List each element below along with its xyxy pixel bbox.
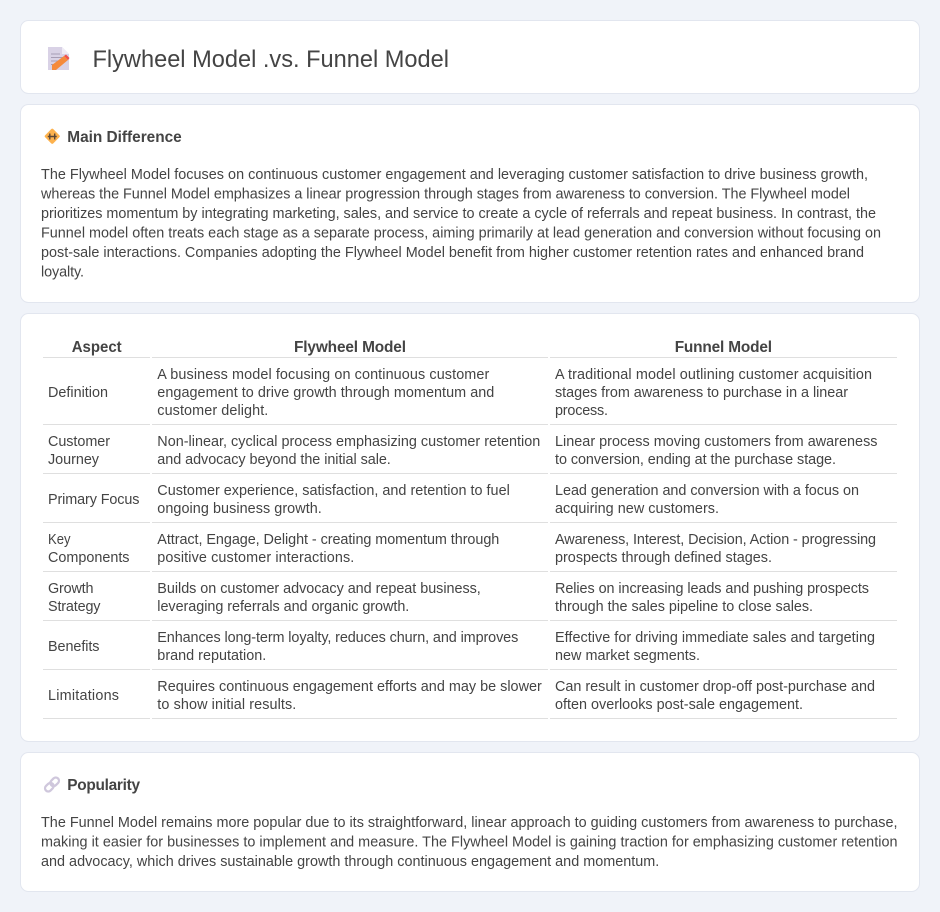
- table row: key components: [48, 532, 876, 566]
- table row: growth strategy: through the sales pipeline to close sales.: [555, 599, 813, 615]
- table row: key components: Awareness, Interest, Decision, Action - progressing: [555, 532, 876, 548]
- text block: main difference paragraph: Funnel model often treats each stage as a separate process, aiming primarily at lead generation and conversion without focusing on: [41, 226, 881, 242]
- text block: main difference paragraph: The Flywheel Model focuses on continuous customer engagement and leveraging customer satisfaction to drive business growth,: [41, 167, 868, 183]
- heading: popularity: Popularity: [67, 777, 140, 794]
- table row: growth strategy: Relies on increasing leads and pushing prospects: [555, 581, 869, 597]
- text block: popularity paragraph: making it easier for businesses to implement and measure. The Flywheel Model is gaining traction for emphasizing customer retention: [41, 834, 898, 850]
- table row: customer journey: Journey: [48, 452, 100, 468]
- text block: main difference paragraph: prioritizes momentum by integrating marketing, sales, and service to create a cycle of referrals and repeat business. In contrast, the: [41, 206, 876, 222]
- table row: benefits: Effective for driving immediate sales and targeting: [555, 630, 875, 646]
- table row: key components: Attract, Engage, Delight - creating momentum through: [157, 532, 499, 548]
- table row: benefits: Benefits: [48, 639, 100, 655]
- table row: growth strategy: Builds on customer advocacy and repeat business,: [157, 581, 481, 597]
- table row: primary focus: acquiring new customers.: [555, 501, 719, 517]
- table row: limitations: Limitations: [48, 688, 119, 704]
- table row: customer journey: Non-linear, cyclical process emphasizing customer retention: [157, 434, 540, 450]
- text block: popularity paragraph: The Funnel Model remains more popular due to its straightforward, linear approach to guiding customers from awareness to purchase,: [41, 815, 898, 831]
- table row: growth strategy: Growth: [48, 581, 94, 597]
- table header row: Aspect: [72, 339, 122, 356]
- table row: primary focus: Primary Focus: [48, 492, 140, 508]
- text block: main difference paragraph: post-sale interactions. Companies adopting the Flywheel Model benefit from higher customer retention rates and enhanced brand: [41, 245, 864, 261]
- table row: key components: prospects through defined stages.: [555, 550, 772, 566]
- table row: key components: Key: [48, 532, 71, 548]
- table row: limitations: to show initial results.: [157, 697, 296, 713]
- text block: popularity paragraph: [41, 815, 898, 870]
- title: Flywheel Model .vs. Funnel Model: [92, 46, 449, 73]
- table row: primary focus: [48, 483, 859, 517]
- table row: benefits: new market segments.: [555, 648, 700, 664]
- table header row: [72, 339, 772, 356]
- text block: popularity paragraph: and advocacy, which drives sustainable growth through continuous engagement and momentum.: [41, 854, 659, 870]
- panel: comparison table: [20, 314, 920, 742]
- table row: benefits: [48, 630, 875, 664]
- table row: primary focus: ongoing business growth.: [157, 501, 322, 517]
- table row: limitations: Requires continuous engagement efforts and may be slower: [157, 679, 542, 695]
- panel: main difference: [20, 104, 920, 302]
- table row: limitations: Can result in customer drop-off post-purchase and: [555, 679, 875, 695]
- table row: definition: A traditional model outlining customer acquisition: [555, 367, 872, 383]
- panel: title header: [20, 20, 920, 94]
- table row: customer journey: [48, 434, 878, 468]
- icon: orange diamond sign: [44, 128, 60, 144]
- table row: customer journey: Linear process moving customers from awareness: [555, 434, 878, 450]
- table row: primary focus: Lead generation and conversion with a focus on: [555, 483, 859, 499]
- table row: growth strategy: Strategy: [48, 599, 101, 615]
- text block: main difference paragraph: whereas the Funnel Model emphasizes a linear progression through stages from awareness to conversion. The Flywheel model: [40, 186, 850, 202]
- table row: definition: engagement to drive growth through momentum and: [157, 385, 494, 401]
- icon: chain link: [44, 776, 60, 793]
- table row: benefits: Enhances long-term loyalty, reduces churn, and improves: [157, 630, 518, 646]
- table row: growth strategy: [48, 581, 869, 615]
- table row: primary focus: Customer experience, satisfaction, and retention to fuel: [157, 483, 510, 499]
- table row: key components: positive customer interactions.: [157, 550, 354, 566]
- icon: document with pencil: [48, 47, 70, 70]
- panel: popularity: [20, 752, 920, 892]
- table row: definition: A business model focusing on continuous customer: [157, 367, 490, 383]
- table row: benefits: brand reputation.: [157, 648, 266, 664]
- table row: key components: Components: [48, 550, 130, 566]
- table row: definition: [48, 367, 872, 419]
- table row: customer journey: and advocacy beyond the initial sale.: [157, 452, 391, 468]
- table row: limitations: often overlooks post-sale engagement.: [555, 697, 803, 713]
- heading: main difference: Main Difference: [67, 129, 182, 146]
- table row: definition: customer delight.: [157, 403, 268, 419]
- table row: limitations: [48, 679, 875, 713]
- table row: customer journey: Customer: [48, 434, 110, 450]
- table row: customer journey: to conversion, ending at the purchase stage.: [555, 452, 836, 468]
- table header row: Flywheel Model: [294, 339, 406, 356]
- table header row: Funnel Model: [675, 339, 772, 356]
- text block: main difference paragraph: loyalty.: [41, 264, 84, 280]
- text block: main difference paragraph: [40, 167, 881, 280]
- table row: definition: Definition: [48, 385, 108, 401]
- table row: growth strategy: leveraging referrals and organic growth.: [157, 599, 409, 615]
- table row: definition: stages from awareness to purchase in a linear: [555, 385, 848, 401]
- table row: definition: process.: [555, 403, 608, 419]
